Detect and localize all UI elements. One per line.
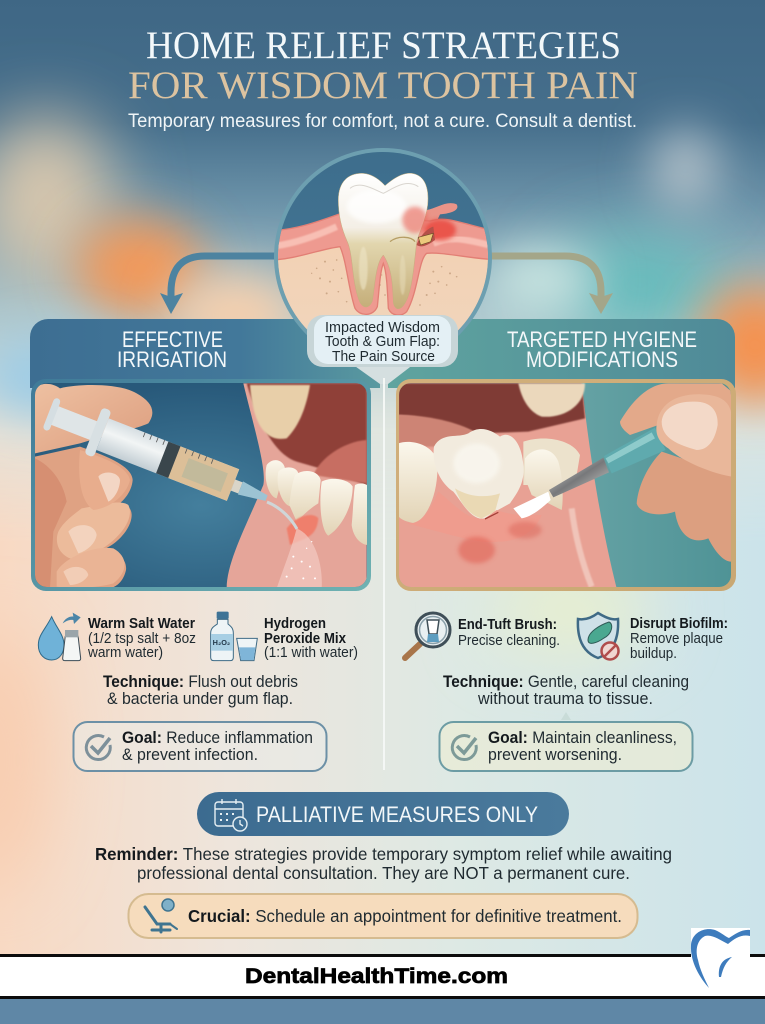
- callout: crucial: [128, 894, 638, 938]
- banner: palliative measures only: [197, 792, 569, 836]
- panel header: effective irrigation: IRRIGATION: [117, 347, 227, 372]
- text: disrupt biofilm: buildup.: [630, 646, 677, 662]
- callout: goal hygiene: Goal: Maintain cleanliness,: [488, 729, 677, 747]
- text: disrupt biofilm: Disrupt Biofilm:: [630, 616, 728, 632]
- text: warm salt water: (1/2 tsp salt + 8oz: [88, 631, 196, 647]
- banner: palliative measures only: PALLIATIVE MEASURES ONLY: [256, 802, 538, 827]
- callout: goal irrigation: & prevent infection.: [122, 746, 258, 764]
- footer band: [0, 954, 765, 1024]
- panel header: targeted hygiene modifications: TARGETED HYGIENE: [507, 327, 697, 352]
- title: FOR WISDOM TOOTH PAIN: [128, 64, 638, 107]
- text: technique hygiene: Technique: Gentle, careful cleaning: [443, 673, 689, 691]
- text: end-tuft brush: End-Tuft Brush:: [458, 617, 557, 633]
- callout: goal hygiene: [440, 712, 692, 771]
- photo: end-tuft brush hygiene: [396, 379, 736, 591]
- title: [128, 24, 638, 107]
- text: technique irrigation: Technique: Flush out debris: [103, 673, 298, 691]
- icon: end-tuft brush magnifier: [405, 613, 450, 658]
- callout: goal hygiene: prevent worsening.: [488, 746, 622, 764]
- title: HOME RELIEF STRATEGIES: [146, 24, 621, 67]
- icon: hydrogen peroxide: H₂O₂: [213, 638, 230, 647]
- text: hydrogen peroxide mix: [264, 616, 358, 661]
- text: warm salt water: [87, 616, 196, 661]
- text: end-tuft brush: [458, 617, 560, 649]
- callout: the pain source: Impacted Wisdom: [325, 320, 440, 336]
- icon: check: [452, 736, 476, 760]
- icon: check: [86, 736, 110, 760]
- arrow: to hygiene: [490, 256, 613, 314]
- callout: the pain source: Tooth & Gum Flap:: [325, 334, 440, 350]
- callout: the pain source: [307, 315, 458, 384]
- text: technique irrigation: [103, 673, 298, 708]
- icon: dental chair: [145, 899, 177, 932]
- text: technique hygiene: [443, 673, 689, 708]
- text: disrupt biofilm: Remove plaque: [630, 631, 723, 647]
- logo: tooth: [691, 928, 750, 988]
- callout: goal irrigation: [74, 722, 326, 771]
- icon: salt water: [38, 613, 81, 661]
- text: disrupt biofilm: [630, 616, 728, 662]
- text: reminder: [95, 844, 672, 883]
- panel header: effective irrigation: [30, 319, 380, 388]
- panel header: targeted hygiene modifications: MODIFICATIONS: [526, 347, 678, 372]
- callout: crucial: Crucial: Schedule an appointment for definitive treatment.: [188, 906, 622, 926]
- text: technique hygiene: without trauma to tissue.: [477, 690, 653, 708]
- callout: goal irrigation: Goal: Reduce inflammation: [122, 729, 313, 747]
- icon: calendar and clock: [215, 799, 247, 831]
- text: hydrogen peroxide mix: (1:1 with water): [264, 645, 358, 661]
- subtitle: Temporary measures for comfort, not a cure. Consult a dentist.: [128, 111, 637, 132]
- photo: syringe irrigation: [31, 379, 371, 591]
- icon: biofilm shield: [578, 613, 618, 660]
- text: reminder: professional dental consultation. They are NOT a permanent cure.: [137, 863, 630, 883]
- text: hydrogen peroxide mix: Hydrogen: [264, 616, 326, 632]
- callout: the pain source: The Pain Source: [332, 349, 435, 365]
- text: hydrogen peroxide mix: Peroxide Mix: [264, 631, 346, 647]
- illustration: impacted tooth and gum flap: [274, 148, 492, 336]
- icon: hydrogen peroxide: [211, 612, 257, 661]
- divider: [383, 378, 385, 770]
- text: reminder: Reminder: These strategies provide temporary symptom relief while awaiting: [95, 844, 672, 864]
- arrow: to irrigation: [160, 256, 276, 314]
- text: warm salt water: Warm Salt Water: [88, 616, 195, 632]
- syringe: [44, 398, 268, 501]
- panel header: effective irrigation: EFFECTIVE: [122, 327, 223, 352]
- text: end-tuft brush: Precise cleaning.: [458, 633, 560, 649]
- footer band: DentalHealthTime.com: [245, 965, 508, 988]
- text: technique irrigation: & bacteria under gum flap.: [107, 690, 293, 708]
- text: warm salt water: warm water): [87, 645, 163, 661]
- panel header: targeted hygiene modifications: [388, 319, 735, 388]
